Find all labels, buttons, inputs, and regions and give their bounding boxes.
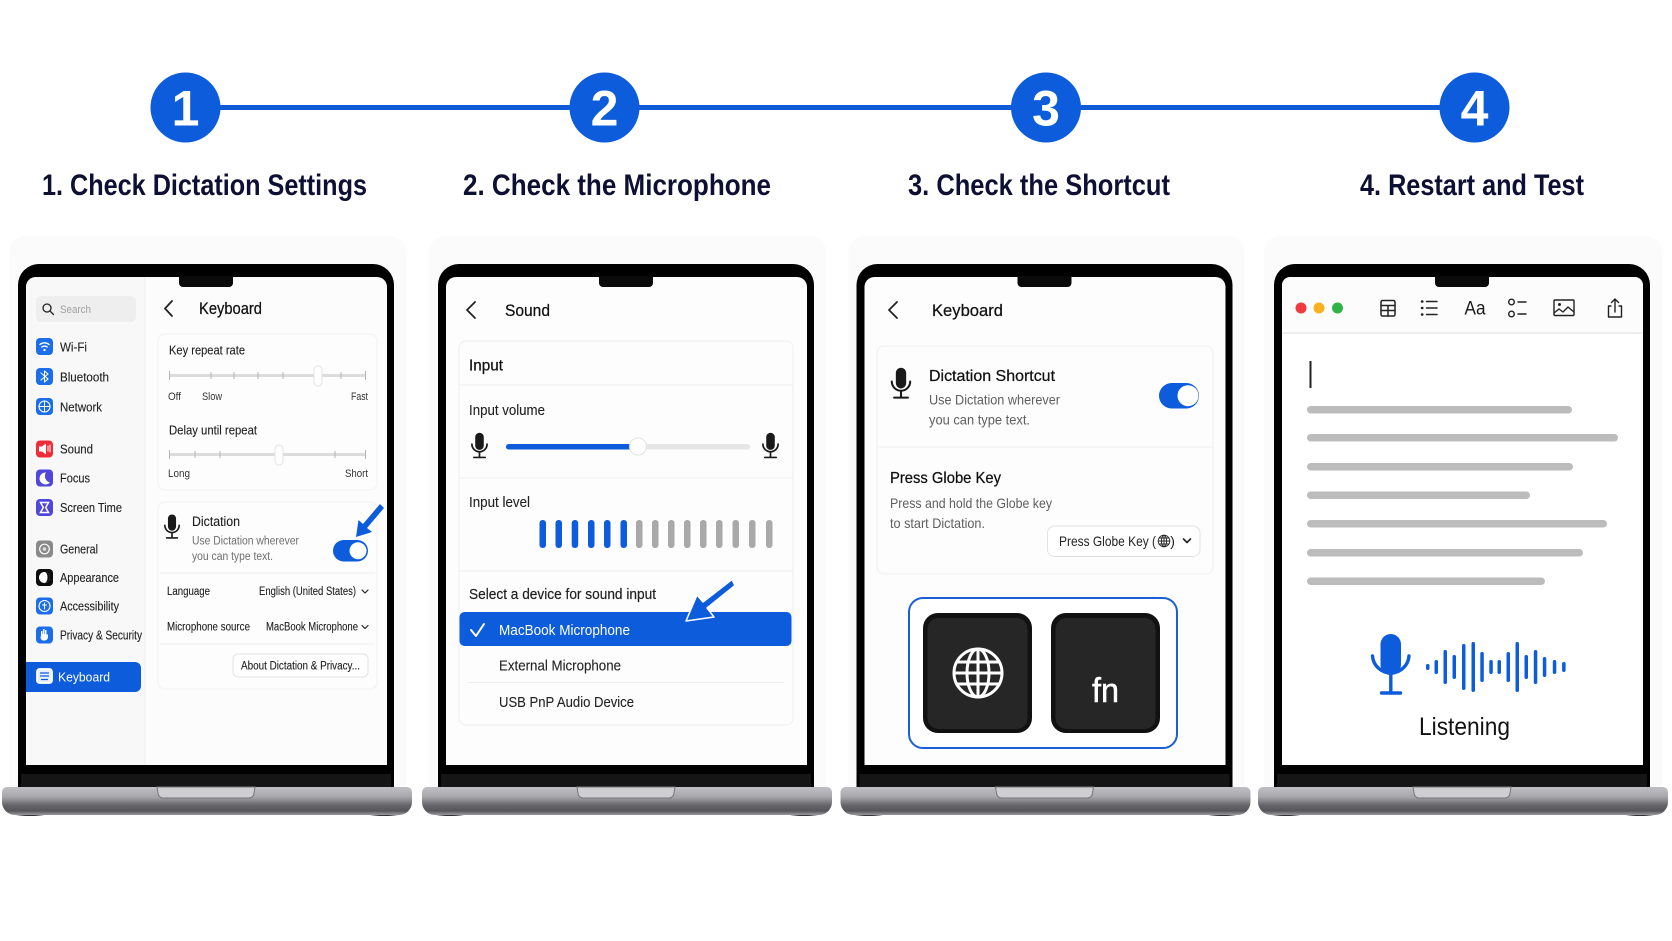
menu: Focus	[36, 470, 90, 486]
dropdown: press globe key: Press Globe Key (	[1059, 533, 1156, 549]
dictation description	[192, 536, 299, 563]
search field: Search	[60, 304, 91, 316]
menu: Sound	[36, 440, 93, 458]
button: about dictation	[233, 654, 368, 677]
icon: microphone	[165, 514, 179, 538]
shortcut key highlight	[909, 598, 1177, 748]
menu: Focus: Focus	[60, 472, 90, 486]
scale labels: Short	[345, 468, 368, 480]
menu: Network	[36, 398, 103, 415]
card: input settings	[459, 341, 793, 725]
dropdown: press globe key	[1048, 526, 1200, 556]
menu: Wi-Fi	[36, 338, 87, 355]
icon: high volume mic	[763, 433, 778, 457]
card: dictation shortcut	[877, 346, 1213, 574]
menu: Appearance: Appearance	[60, 571, 119, 585]
slider: key repeat	[169, 366, 366, 386]
step badge 1	[150, 72, 220, 142]
panel card background	[9, 236, 406, 811]
selected device row	[460, 612, 792, 646]
laptop frame	[422, 264, 832, 816]
scale labels	[168, 391, 368, 403]
menu: Network: Network	[60, 400, 103, 414]
listening label: Listening	[1419, 713, 1510, 741]
menu: General	[36, 540, 98, 558]
panel card background	[1264, 236, 1662, 811]
connector line	[186, 105, 1476, 110]
menu: Sound: Sound	[60, 442, 93, 456]
icon: checklist	[1509, 299, 1526, 317]
menu: Accessibility: Accessibility	[60, 600, 120, 614]
notch	[1018, 276, 1072, 287]
laptop frame	[840, 264, 1250, 816]
scale labels	[168, 468, 368, 480]
globe key description	[890, 495, 1052, 531]
laptop screen	[26, 277, 387, 765]
globe key heading: Press Globe Key	[890, 470, 1001, 487]
dropdown: press globe key: )	[1170, 533, 1175, 549]
key: globe	[923, 613, 1032, 733]
laptop screen	[446, 277, 807, 765]
audio waveform	[1426, 642, 1566, 692]
step badge 1: 1	[172, 80, 199, 136]
dictation label: Dictation	[192, 514, 240, 529]
menu: Bluetooth: Bluetooth	[60, 370, 109, 384]
icon: listening microphone	[1372, 634, 1409, 693]
icon: microphone	[892, 368, 910, 398]
shortcut description	[929, 392, 1060, 428]
dictation description: you can type text.	[192, 551, 273, 563]
icon: image	[1554, 300, 1574, 316]
icon: text format: Aa	[1464, 298, 1486, 320]
scale labels: Long	[168, 468, 190, 480]
icon: table	[1381, 300, 1395, 316]
step badge 3	[1011, 72, 1081, 142]
toggle on	[1159, 383, 1199, 408]
menu: General: General	[60, 542, 98, 556]
globe key description: to start Dictation.	[890, 515, 985, 531]
icon: share	[1608, 299, 1622, 317]
arrow pointing to toggle	[356, 504, 384, 537]
button: about dictation: About Dictation & Privacy...	[241, 660, 360, 672]
label: delay until repeat: Delay until repeat	[169, 424, 257, 438]
device: external microphone: External Microphone	[499, 658, 621, 674]
screen title: Keyboard	[932, 301, 1003, 320]
step badge 2	[570, 72, 640, 142]
input level label: Input level	[469, 494, 530, 511]
notch	[1435, 276, 1489, 287]
toggle on	[333, 540, 368, 562]
back chevron	[165, 301, 172, 316]
scale labels: Off	[168, 391, 182, 403]
language row: Language	[167, 586, 210, 598]
screen title: Keyboard	[199, 299, 262, 318]
laptop screen	[864, 277, 1226, 765]
laptop frame	[1258, 264, 1668, 816]
notch	[599, 276, 653, 287]
search field	[36, 296, 136, 322]
screen title: Sound	[505, 301, 550, 320]
back chevron	[889, 302, 897, 318]
step badge 3: 3	[1032, 80, 1060, 136]
device list label: Select a device for sound input	[469, 586, 657, 603]
sidebar	[26, 277, 145, 765]
section heading: input: Input	[469, 358, 504, 374]
language row	[167, 586, 368, 598]
microphone source row: MacBook Microphone	[266, 622, 358, 634]
key: fn: fn	[1092, 672, 1119, 710]
heading: step 3: 3. Check the Shortcut	[908, 169, 1170, 202]
dictation description: Use Dictation wherever	[192, 536, 299, 548]
laptop frame	[2, 264, 412, 816]
menu: Appearance	[36, 569, 119, 586]
heading: step 2: 2. Check the Microphone	[463, 169, 771, 202]
panel: step 4 restart and test	[1258, 236, 1668, 816]
menu: Bluetooth	[36, 368, 109, 385]
step badge 2: 2	[591, 80, 618, 136]
laptop screen	[1282, 277, 1643, 765]
text cursor	[1310, 361, 1312, 388]
panel: step 1 dictation settings	[2, 236, 412, 816]
menu: Privacy and Security	[36, 626, 143, 644]
shortcut heading: Dictation Shortcut	[929, 368, 1056, 385]
language row: English (United States)	[259, 586, 356, 598]
panel card background	[429, 236, 826, 811]
window controls	[1296, 302, 1343, 314]
back chevron	[467, 302, 475, 318]
panel card background	[848, 236, 1244, 811]
volume slider	[506, 438, 750, 455]
globe key description: Press and hold the Globe key	[890, 495, 1052, 511]
icon: list	[1422, 302, 1437, 314]
menu: Keyboard selected: Keyboard	[58, 670, 110, 684]
microphone source row: Microphone source	[167, 622, 250, 634]
panel: step 2 microphone	[422, 236, 832, 816]
placeholder document text lines	[1307, 406, 1618, 585]
notch	[179, 276, 233, 287]
icon: low volume mic	[472, 433, 487, 457]
step badge 4: 4	[1461, 80, 1489, 136]
device: usb audio: USB PnP Audio Device	[499, 694, 634, 711]
shortcut description: you can type text.	[929, 412, 1030, 428]
panel: step 3 shortcut	[840, 236, 1250, 816]
scale labels: Slow	[202, 391, 222, 403]
heading: step 1: 1. Check Dictation Settings	[42, 169, 367, 202]
menu: Wi-Fi: Wi-Fi	[60, 340, 87, 354]
arrow pointing to microphone	[686, 580, 735, 621]
menu: Screen Time: Screen Time	[60, 501, 122, 515]
microphone source row	[167, 622, 368, 634]
key: fn	[1051, 613, 1160, 733]
shortcut description: Use Dictation wherever	[929, 392, 1060, 408]
selected device row: MacBook Microphone	[499, 622, 630, 639]
step badge 4	[1440, 72, 1510, 142]
toolbar	[1282, 277, 1643, 333]
menu: Accessibility	[36, 598, 120, 614]
sidebar edge	[144, 277, 146, 765]
stepper timeline	[150, 72, 1510, 142]
card: dictation	[158, 502, 384, 689]
input level meter	[540, 520, 772, 548]
menu: Keyboard selected	[26, 662, 141, 692]
scale labels: Fast	[351, 391, 368, 403]
label: key repeat rate: Key repeat rate	[169, 344, 245, 358]
slider: delay	[169, 445, 366, 465]
heading: step 4: 4. Restart and Test	[1360, 169, 1584, 202]
input volume label: Input volume	[469, 402, 545, 419]
menu: Screen Time	[36, 499, 122, 516]
menu: Privacy and Security: Privacy & Security	[60, 628, 143, 642]
card: key repeat settings	[158, 334, 377, 490]
